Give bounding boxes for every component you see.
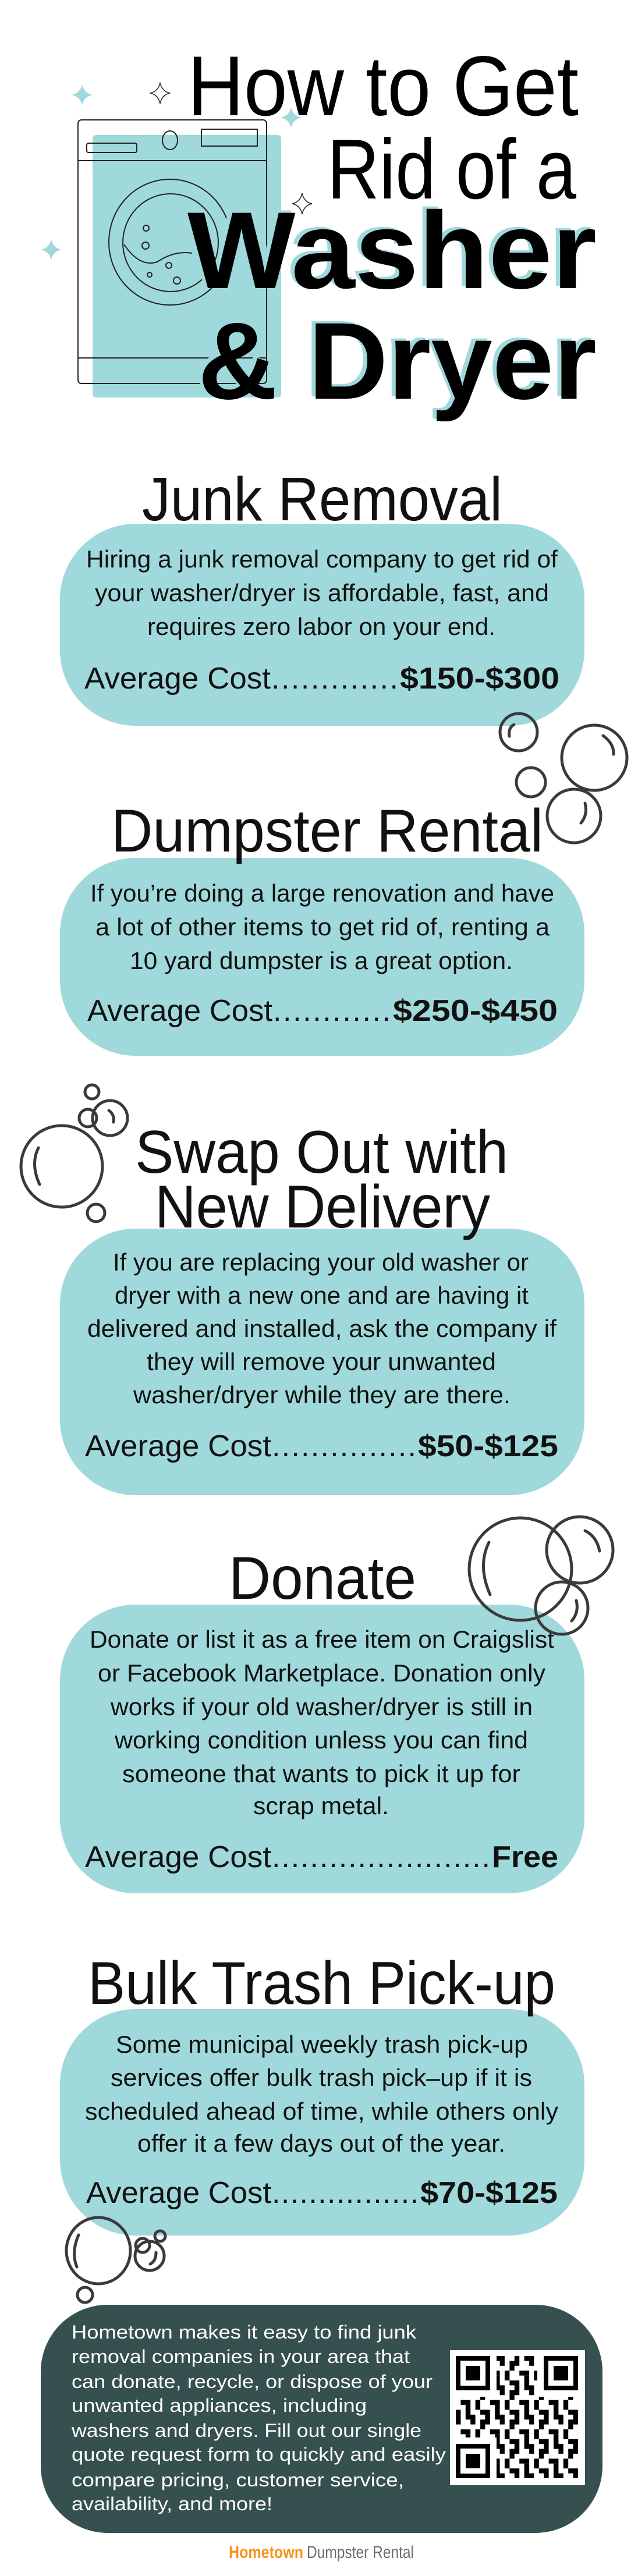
panel: bulk trash: Some municipal weekly trash pick-up: [116, 2031, 528, 2058]
panel: donate: .......................: [272, 1840, 490, 1874]
panel: Hometown call to action: availability, and more!: [72, 2493, 272, 2514]
footer logo: Dumpster Rental: [307, 2543, 414, 2562]
panel: dumpster rental: $250-$450: [393, 994, 558, 1028]
panel: donate: works if your old washer/dryer is still in: [110, 1693, 533, 1720]
panel: swap out: Average Cost: [85, 1429, 272, 1463]
panel: junk removal: Average Cost: [84, 662, 271, 696]
title: [183, 38, 597, 422]
panel: Hometown call to action: can donate, recycle, or dispose of your: [72, 2371, 433, 2392]
panel: swap out: washer/dryer while they are there.: [133, 1381, 511, 1408]
panel: Hometown call to action: washers and dryers. Fill out our single: [71, 2420, 421, 2441]
panel: dumpster rental: a lot of other items to get rid of, renting a: [95, 913, 550, 941]
panel: donate: someone that wants to pick it up for: [122, 1760, 520, 1787]
heading: Bulk Trash Pick-up: Bulk Trash Pick-up: [88, 1950, 555, 2017]
panel: Hometown call to action: unwanted appliances, including: [72, 2395, 367, 2416]
panel: dumpster rental: If you’re doing a large renovation and have: [90, 879, 554, 907]
QR code: [450, 2350, 585, 2485]
icon: bubbles bottom: [66, 2217, 165, 2302]
panel: bulk trash: scheduled ahead of time, while others only: [85, 2098, 558, 2125]
panel: swap out: delivered and installed, ask the company if: [87, 1315, 557, 1342]
panel: Hometown call to action: [41, 2305, 602, 2533]
panel: swap out: dryer with a new one and are having it: [115, 1282, 529, 1309]
header illustration: washing machine: [78, 120, 281, 398]
panel: dumpster rental: 10 yard dumpster is a great option.: [130, 947, 513, 974]
panel: donate: scrap metal.: [253, 1792, 389, 1819]
title: & Dryer: [198, 300, 597, 422]
panel: Hometown call to action: quote request form to quickly and easily: [72, 2444, 446, 2465]
panel: dumpster rental: [60, 858, 584, 1056]
footer logo: Hometown: [229, 2543, 303, 2562]
title: How to Get: [187, 38, 579, 133]
title: Washer: [187, 189, 597, 311]
panel: donate: working condition unless you can find: [114, 1726, 528, 1754]
panel: bulk trash: Average Cost: [86, 2176, 272, 2210]
panel: swap out: $50-$125: [418, 1429, 558, 1463]
panel: junk removal: $150-$300: [400, 662, 559, 696]
panel: donate: Average Cost: [85, 1840, 272, 1874]
panel: Hometown call to action: compare pricing, customer service,: [72, 2469, 404, 2490]
panel: donate: [60, 1605, 584, 1893]
panel: Hometown call to action: Hometown makes it easy to find junk: [72, 2322, 417, 2343]
heading: Donate: Donate: [229, 1545, 416, 1612]
title: Washer: [183, 187, 593, 309]
panel: donate: Donate or list it as a free item on Craigslist: [90, 1626, 554, 1653]
title: & Dryer: [194, 297, 593, 420]
heading: Swap Out with New Delivery: [135, 1119, 508, 1241]
title: Rid of a: [327, 122, 577, 217]
icon: bubbles left: [21, 1085, 127, 1222]
panel: swap out: ...............: [272, 1429, 416, 1463]
heading: Swap Out with New Delivery: New Delivery: [155, 1173, 490, 1241]
icon: bubbles donate: [469, 1517, 613, 1634]
heading: Junk Removal: Junk Removal: [142, 465, 502, 534]
panel: bulk trash: $70-$125: [420, 2176, 558, 2210]
heading: Swap Out with New Delivery: Swap Out with: [135, 1119, 508, 1186]
panel: junk removal: requires zero labor on your end.: [147, 613, 495, 640]
panel: bulk trash: [60, 2009, 584, 2236]
panel: donate: or Facebook Marketplace. Donation only: [98, 1659, 545, 1687]
footer logo: [229, 2543, 414, 2562]
panel: Hometown call to action: removal companies in your area that: [72, 2346, 410, 2367]
panel: donate: Free: [492, 1840, 558, 1874]
panel: dumpster rental: ............: [273, 994, 391, 1028]
panel: swap out: [60, 1229, 584, 1495]
panel: junk removal: .............: [271, 662, 398, 696]
panel: bulk trash: ................: [272, 2176, 419, 2210]
panel: junk removal: your washer/dryer is affordable, fast, and: [95, 579, 549, 606]
icon: bubbles right: [500, 714, 627, 843]
panel: junk removal: [60, 524, 584, 726]
panel: bulk trash: services offer bulk trash pick–up if it is: [111, 2064, 532, 2091]
panel: swap out: If you are replacing your old washer or: [113, 1248, 529, 1276]
panel: junk removal: Hiring a junk removal company to get rid of: [86, 545, 558, 573]
panel: dumpster rental: Average Cost: [87, 994, 273, 1028]
heading: Dumpster Rental: Dumpster Rental: [111, 797, 543, 865]
panel: swap out: they will remove your unwanted: [147, 1348, 496, 1375]
icon: sparkles: [41, 83, 312, 260]
panel: bulk trash: offer it a few days out of the year.: [137, 2130, 505, 2157]
